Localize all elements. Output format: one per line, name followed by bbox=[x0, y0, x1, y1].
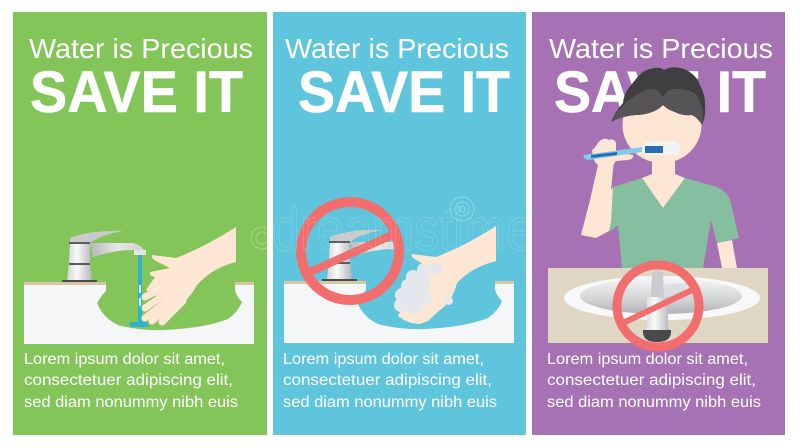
icon: water stream bbox=[130, 255, 148, 327]
watermark spiral bbox=[450, 197, 474, 221]
face bbox=[622, 87, 702, 163]
text block: green panel: sed diam nonummy nibh euis bbox=[24, 394, 238, 411]
text block: blue panel: Lorem ipsum dolor sit amet, bbox=[283, 351, 484, 368]
hand bbox=[592, 139, 633, 168]
title: Water is Precious: Water is Precious bbox=[29, 33, 253, 64]
text block: purple panel: sed diam nonummy nibh euis bbox=[547, 394, 761, 411]
washbasin bbox=[564, 276, 760, 320]
toothbrush bbox=[584, 142, 680, 160]
title: Water is Precious: Water is Precious bbox=[549, 33, 773, 64]
text block: green panel bbox=[24, 351, 238, 411]
shirt bbox=[609, 178, 739, 268]
heading: SAVE IT: SAVE IT bbox=[554, 60, 766, 125]
text block: blue panel: consectetuer adipiscing elit, bbox=[283, 372, 492, 389]
icon: soapy hands bbox=[394, 226, 496, 324]
icon: faucet bbox=[322, 230, 404, 281]
text block: purple panel: consectetuer adipiscing elit, bbox=[547, 372, 756, 389]
panel: green, running tap bbox=[13, 12, 273, 435]
title: Water is Precious: Water is Precious bbox=[285, 33, 509, 64]
text block: blue panel: sed diam nonummy nibh euis bbox=[283, 394, 497, 411]
hair bbox=[611, 67, 705, 125]
sink bbox=[284, 281, 514, 343]
text block: blue panel bbox=[283, 351, 497, 411]
icon: prohibition sign bbox=[617, 265, 699, 347]
heading: SAVE IT: SAVE IT bbox=[30, 60, 243, 125]
forearm bbox=[581, 160, 614, 238]
counter bbox=[548, 268, 768, 343]
watermark spiral bbox=[251, 227, 273, 249]
text block: purple panel: Lorem ipsum dolor sit amet, bbox=[547, 351, 748, 368]
sink bbox=[24, 282, 254, 344]
text block: green panel: Lorem ipsum dolor sit amet, bbox=[24, 351, 225, 368]
arms bbox=[717, 240, 737, 268]
panel: purple, tap off while brushing bbox=[532, 12, 785, 435]
watermark text: dreamstime bbox=[272, 196, 534, 263]
neck bbox=[642, 158, 685, 208]
icon: faucet bbox=[62, 231, 146, 282]
illustration: man brushing teeth bbox=[581, 67, 739, 268]
text block: purple panel bbox=[547, 351, 761, 411]
icon: prohibition sign bbox=[301, 202, 399, 300]
panel: blue, tap off while soaping bbox=[273, 12, 526, 435]
icon: hands bbox=[145, 227, 236, 322]
heading: SAVE IT: SAVE IT bbox=[298, 60, 510, 125]
text block: green panel: consectetuer adipiscing elit, bbox=[24, 372, 233, 389]
icon: faucet top view bbox=[643, 270, 688, 342]
